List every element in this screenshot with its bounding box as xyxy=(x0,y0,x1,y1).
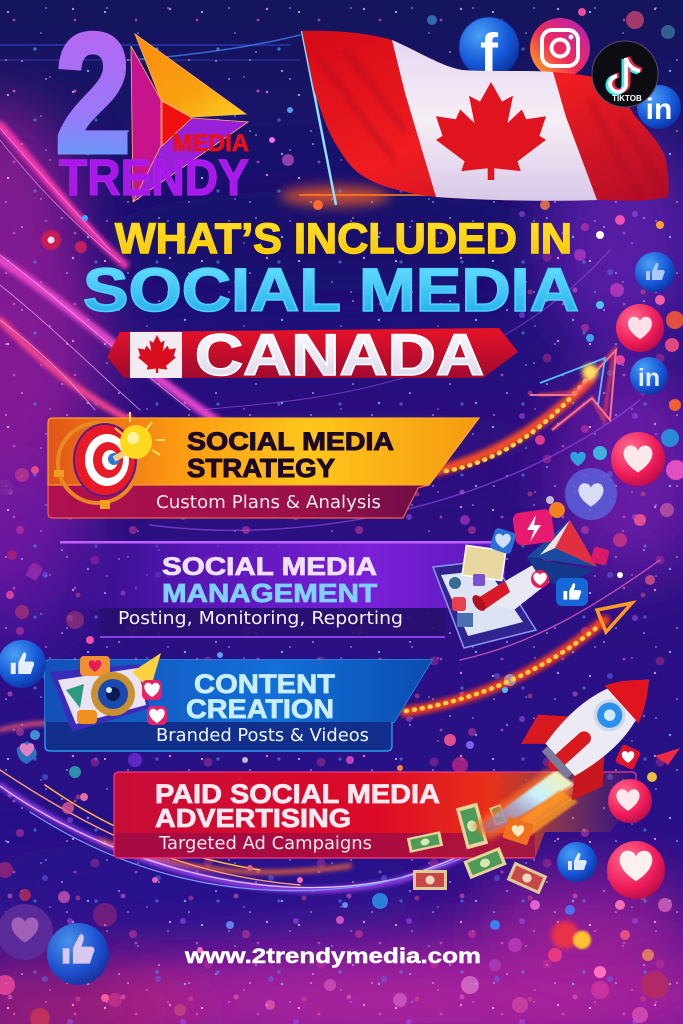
bubble: heart large xyxy=(607,841,665,899)
heading: STRATEGY xyxy=(187,453,335,483)
heading: CREATION xyxy=(186,694,334,724)
bubble: small thumb xyxy=(372,893,388,909)
heading xyxy=(186,669,336,724)
title: what's included in: WHAT’S INCLUDED IN xyxy=(115,215,572,263)
badge: heart xyxy=(531,570,549,588)
flag white band xyxy=(392,40,597,201)
rocket flame xyxy=(472,768,578,845)
flag body xyxy=(302,31,669,201)
icon: tablet and megaphone xyxy=(433,502,610,648)
icon: tiktok: TIKTOB xyxy=(612,94,642,103)
bubble: blue xyxy=(635,252,675,292)
panel: paid social media advertising xyxy=(114,772,636,858)
bubble: purple heart xyxy=(0,904,53,960)
icon: camera xyxy=(50,653,167,732)
megaphone xyxy=(490,563,552,610)
dotted arrow: strategy growth xyxy=(446,350,616,471)
logo numeral: 2 xyxy=(55,0,131,189)
panel: content creation xyxy=(45,660,432,751)
canada flag xyxy=(302,31,669,205)
logo word media: MEDIA xyxy=(172,130,249,157)
tablet xyxy=(433,560,536,648)
bubble: big thumb xyxy=(47,923,109,985)
heading: PAID SOCIAL MEDIA xyxy=(155,779,440,809)
icon: money bills xyxy=(407,803,547,894)
heading: SOCIAL MEDIA xyxy=(162,553,377,581)
icon: tiktok xyxy=(592,41,658,107)
rocket body xyxy=(514,644,681,808)
heading: CONTENT xyxy=(194,669,336,699)
subtitle: Targeted Ad Campaigns xyxy=(158,834,372,854)
title: social media: SOCIAL MEDIA xyxy=(83,256,579,324)
dotted arrow: content growth xyxy=(406,603,632,711)
logo: 2 Trendy Media xyxy=(55,0,249,206)
subtitle: Custom Plans & Analysis xyxy=(156,493,381,513)
bubbles: lower left xyxy=(0,904,109,985)
website url: www.2trendymedia.com xyxy=(184,945,481,968)
icon bubbles: right column: in xyxy=(638,364,660,392)
flagpole xyxy=(302,31,336,205)
bubble: linkedin xyxy=(630,357,668,395)
ribbon label: CANADA xyxy=(195,323,484,388)
heading: SOCIAL MEDIA xyxy=(187,428,394,456)
icon: linkedin top: in xyxy=(646,93,672,126)
heading: ADVERTISING xyxy=(155,803,351,833)
icon: linkedin top xyxy=(637,85,681,129)
panel: social media strategy xyxy=(48,412,479,518)
subtitle: Branded Posts & Videos xyxy=(156,726,369,746)
floating badge xyxy=(615,744,641,770)
icon: facebook: f xyxy=(480,23,499,83)
heading xyxy=(187,428,394,483)
bubble: thumb left xyxy=(0,640,46,688)
subtitle: Posting, Monitoring, Reporting xyxy=(118,609,403,629)
icon bubbles: right column xyxy=(565,252,675,520)
bubble: heart xyxy=(616,304,664,352)
bubbles: lower right xyxy=(372,779,665,909)
bubble: pale thumb xyxy=(565,468,617,520)
bubble: heart xyxy=(608,779,652,823)
sparkle arrow xyxy=(132,653,161,690)
panel: social media management: MANAGEMENT xyxy=(162,578,377,608)
badge: thumb xyxy=(556,578,588,606)
icon: instagram xyxy=(530,18,590,78)
badge: bolt xyxy=(512,508,555,546)
heading xyxy=(155,779,440,833)
badges: hearts xyxy=(142,680,162,700)
bubble: heart large xyxy=(611,432,665,486)
canada ribbon xyxy=(107,323,518,388)
icon: rocket xyxy=(472,644,681,845)
ribbon flag square xyxy=(130,332,182,378)
icon: target and bulb xyxy=(54,412,165,509)
maple leaf xyxy=(436,82,546,180)
icon: facebook xyxy=(459,17,519,83)
bubble: small heart left xyxy=(17,741,37,764)
panel: social media management xyxy=(55,541,505,638)
bubble: thumb xyxy=(557,842,597,882)
logo word trendy: TRENDY xyxy=(59,149,249,206)
logo triangle mark xyxy=(131,34,248,202)
